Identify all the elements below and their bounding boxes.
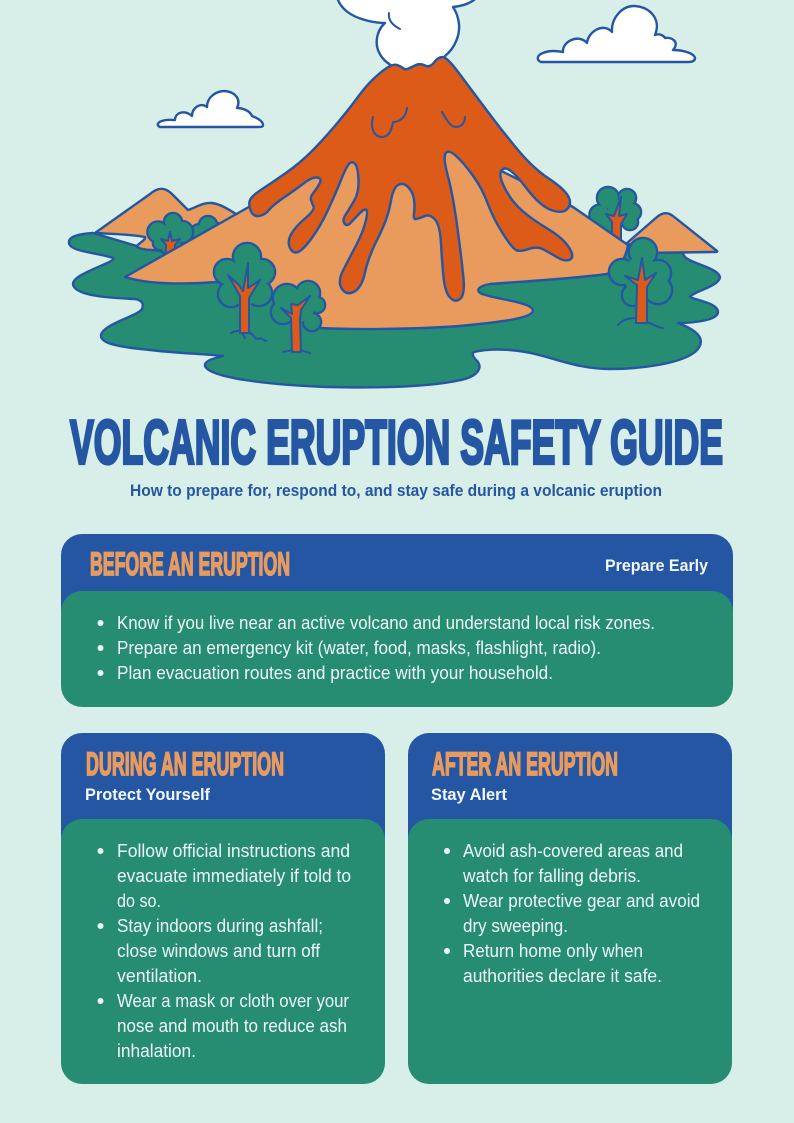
after list: watch for falling debris. <box>462 866 641 886</box>
after body background <box>408 819 732 1084</box>
mountain <box>125 120 628 329</box>
before tagline: Prepare Early <box>605 556 709 575</box>
tree: front left large <box>215 244 274 341</box>
after list: Wear protective gear and avoid <box>463 891 700 911</box>
hill: back left <box>95 189 240 252</box>
during list <box>98 841 351 1061</box>
after list: dry sweeping. <box>463 916 568 936</box>
before body background <box>61 591 733 707</box>
cloud: right <box>538 6 695 62</box>
during list: inhalation. <box>117 1041 196 1061</box>
after heading: AFTER AN ERUPTION <box>432 746 618 782</box>
during list: nose and mouth to reduce ash <box>117 1016 347 1036</box>
cloud: left <box>158 91 263 127</box>
during list: close windows and turn off <box>117 941 321 961</box>
during tagline: Protect Yourself <box>85 785 210 804</box>
before list: Plan evacuation routes and practice with your household. <box>117 663 553 683</box>
during list: Follow official instructions and <box>117 841 350 861</box>
smoke plume <box>337 0 477 72</box>
panel: before an eruption <box>61 534 733 707</box>
before heading: BEFORE AN ERUPTION <box>90 546 290 582</box>
subtitle: How to prepare for, respond to, and stay safe during a volcanic eruption <box>130 481 662 500</box>
after list: Avoid ash-covered areas and <box>463 841 683 861</box>
before header background <box>61 534 733 634</box>
after list: authorities declare it safe. <box>463 966 662 986</box>
lava flow <box>249 57 572 301</box>
during heading: DURING AN ERUPTION <box>86 746 284 782</box>
hill: back right <box>627 213 717 253</box>
tree: back left with bushes <box>148 214 223 260</box>
after list <box>444 841 700 986</box>
before list: Prepare an emergency kit (water, food, masks, flashlight, radio). <box>117 638 601 658</box>
during list: Stay indoors during ashfall; <box>117 916 323 936</box>
lava curls <box>372 108 465 137</box>
panel: during an eruption <box>61 733 385 1084</box>
during list: ventilation. <box>117 966 202 986</box>
before list: Know if you live near an active volcano and understand local risk zones. <box>117 613 655 633</box>
during body background <box>61 819 385 1084</box>
after tagline: Stay Alert <box>431 785 507 804</box>
before list <box>98 613 655 683</box>
during list: Wear a mask or cloth over your <box>117 991 349 1011</box>
during list: evacuate immediately if told to <box>117 866 351 886</box>
green land <box>69 233 720 387</box>
illustration: volcano landscape <box>69 0 720 387</box>
during list: do so. <box>117 891 161 911</box>
after header background <box>408 733 732 863</box>
during header background <box>61 733 385 863</box>
panel: after an eruption <box>408 733 732 1084</box>
tree: back right <box>590 188 640 242</box>
tree: front right <box>610 239 671 328</box>
tree: front left small <box>272 282 324 353</box>
after list: Return home only when <box>463 941 643 961</box>
